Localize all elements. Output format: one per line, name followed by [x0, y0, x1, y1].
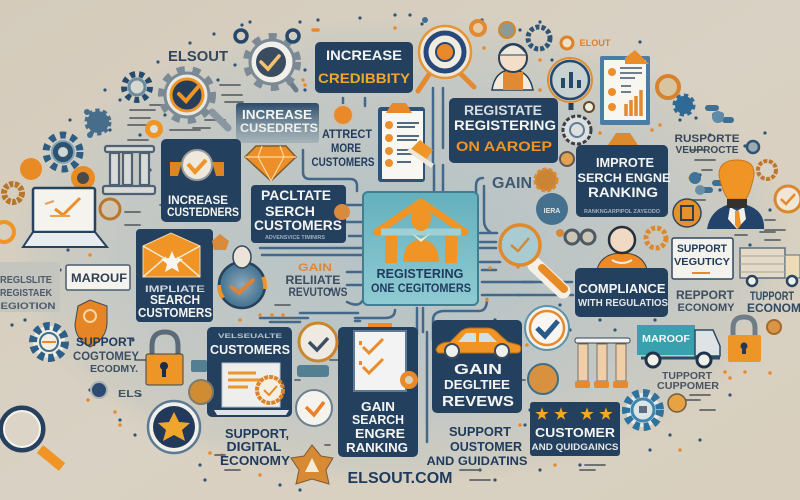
icon: gear left [33, 326, 65, 358]
text: registate registration: REGISTAEK [0, 288, 53, 299]
panel: compliance with regulations: WITH REGULATIOS [578, 298, 668, 309]
text: attract more customers: CUSTOMERS [312, 155, 374, 169]
icon: shield [75, 300, 107, 347]
icon: right badges [673, 161, 800, 227]
panel: customer stars: CUSTOMER [535, 426, 615, 440]
panel: facilitate search customers: CUSTOMERS [254, 217, 342, 233]
text: report economy: REPPORT [676, 290, 734, 302]
panel: customers laptop: CUSTOMERS [210, 343, 290, 357]
text: support digital economy: DIGITAL [226, 440, 282, 454]
icon: star circle [148, 401, 200, 453]
panel: customers laptop: VELSEUALTE [218, 333, 283, 340]
panel: car reviews: DEGLTIEE [444, 377, 510, 392]
panel: increase credibility: INCREASE [326, 47, 402, 63]
panel: gain search engine ranking: RANKING [346, 440, 408, 455]
panel: increase custedners: INCREASE [168, 193, 228, 207]
text: support customer and guidations: OUSTOMER [450, 439, 523, 454]
text: support customer economy: SUPPORT [76, 335, 135, 349]
panel: improve search engine ranking: IMPROTE [596, 156, 654, 170]
panel: facilitate search customers: SERCH [265, 203, 315, 219]
icon: connector tool [191, 360, 329, 377]
panel: improve search engine ranking: RANKING [588, 185, 658, 200]
icon: blue gear [626, 393, 660, 427]
panel: gain search engine ranking: ENGRE [355, 426, 405, 441]
panel: registate registering on maroof: ON AAROEP [456, 139, 552, 154]
orange badge [333, 105, 353, 125]
text: ELOUT: ELOUT [580, 38, 611, 48]
panel: increase credibility [315, 42, 413, 93]
icon: orange seal [657, 76, 679, 98]
text: support customer economy [73, 335, 139, 375]
text: registate registration [0, 262, 60, 312]
icon: pillars [103, 146, 155, 194]
icon: orange ring badge [561, 37, 573, 49]
icon: seal dark [747, 141, 759, 153]
panel: car reviews: GAIN [454, 362, 502, 378]
icon: orange pin [668, 394, 686, 412]
icon: gear link [556, 229, 595, 244]
icon: badge ICRA: IERA [544, 208, 560, 215]
text: tupport economy [747, 291, 800, 315]
panel: car reviews: REVEWS [442, 394, 514, 410]
text: support digital economy: ECONOMY [220, 454, 291, 468]
panel: central registering: ONE CEGITOMERS [371, 281, 471, 295]
icon: orange pillars [575, 338, 630, 388]
text: gain: GAIN [492, 175, 532, 192]
text: rusporte: RUSPORTE [674, 133, 740, 145]
panel: improve search engine ranking: RANKNGARPIPOL ZAYEODO [584, 209, 660, 215]
text: support customer and guidations: AND GUIDATINS [426, 454, 528, 468]
panel: increase custedners [161, 139, 241, 222]
text: tupport cuppomer [657, 371, 720, 392]
text: registate registration: REGLSLITE [0, 275, 52, 286]
icon: clipboard [378, 103, 434, 182]
icon: compliance person [596, 227, 648, 274]
text: gain reliable reviews: GAIN [298, 262, 332, 274]
panel: registate registering on maroof [449, 98, 558, 163]
icon: dark seal left [91, 382, 107, 398]
text: support customer economy: ECODMY. [90, 364, 138, 375]
panel: customer stars [530, 402, 620, 456]
text: registate registration: EGIOTION [0, 301, 56, 312]
panel: customers laptop [207, 327, 292, 417]
panel: compliance with regulations: COMPLIANCE [578, 282, 666, 296]
text: attract more customers: ATTRECT [322, 127, 373, 141]
icon: target magnifier [418, 26, 474, 91]
panel: increase credibility: CREDIBBITY [318, 70, 411, 86]
text: gain reliable reviews [286, 262, 348, 299]
icon: worker top [492, 44, 533, 90]
panel: mail: SEARCH [150, 293, 200, 307]
orange badges left [0, 120, 163, 242]
panel: mail [136, 229, 213, 322]
panel: improve search engine ranking [576, 133, 670, 217]
icon: small orange ring [471, 21, 485, 35]
text: website: ELSOUT.COM [348, 470, 452, 487]
icon: orange gear gain [535, 169, 557, 191]
text: tupport cuppomer: CUPPOMER [657, 381, 720, 392]
text: support digital economy: SUPPORT, [225, 427, 289, 441]
box: support vegutiy: SUPPORT [677, 243, 727, 255]
icon: businessman [707, 160, 764, 229]
box: support vegutiy [672, 238, 733, 279]
icon: laptop check [23, 188, 107, 247]
panel: increase cusedrets: INCREASE [242, 107, 312, 122]
icon: check circles [296, 323, 337, 426]
connector lines [260, 88, 573, 442]
icon: orange coin [528, 364, 558, 394]
icon: truck maroof [637, 325, 720, 367]
icon: person check [219, 246, 265, 308]
panel: customer stars: AND QUIDGAINCS [532, 442, 618, 453]
panel: increase cusedrets: CUSEDRETS [240, 121, 318, 135]
text: tupport cuppomer: TUPPORT [662, 371, 712, 382]
text: rusporte [674, 133, 740, 156]
text: gain reliable reviews: RELIIATE [286, 275, 341, 287]
panel: increase cusedrets [236, 103, 319, 143]
panel: mail: CUSTOMERS [138, 306, 212, 320]
text: support customer and guidations: SUPPORT [449, 424, 511, 439]
text: support customer economy: COGTOMEY [73, 349, 139, 363]
text: report economy: ECONOMY [678, 302, 735, 314]
panel: central registering: REGISTERING [376, 266, 464, 281]
text: attract more customers: MORE [331, 141, 361, 155]
icon: gold star seal [291, 445, 333, 484]
panel: customer stars: ★ [535, 406, 549, 423]
panel: mail: IMPLIATE [145, 284, 205, 295]
box: marouf: MAROUF [71, 273, 127, 285]
icon: orange gear right [646, 228, 666, 248]
icon: truck maroof: MAROOF [642, 334, 690, 345]
panel: facilitate search customers: PACLTATE [261, 187, 331, 203]
text: rusporte: VEUPROCTE [676, 145, 739, 156]
panel: facilitate search customers: ADVENSVICE TIMINIRS [265, 235, 326, 241]
box: marouf [66, 265, 130, 290]
panel: registate registering on maroof: REGISTATE [464, 103, 542, 118]
panel: increase custedners: CUSTEDNERS [167, 205, 239, 219]
icon: lock left [146, 332, 183, 385]
text: support digital economy [220, 427, 291, 468]
panel: gain search engine ranking [338, 323, 418, 457]
text: support customer and guidations [426, 424, 528, 468]
icon: diamond [245, 146, 296, 181]
orange pin [334, 204, 350, 220]
text: ELS: ELS [118, 388, 142, 400]
icon: magnifier bottom-left [1, 408, 62, 467]
icon: tablet report [600, 50, 650, 125]
panel: compliance with regulations [575, 268, 668, 317]
box: support vegutiy: VEGUTICY [674, 256, 730, 268]
text: tupport economy: ECONOM [747, 303, 800, 315]
panel: gain search engine ranking: GAIN [361, 399, 395, 414]
icon: analysis magnifier [548, 58, 592, 110]
panel: customer stars: ★ [554, 406, 568, 423]
blue cog blobs [87, 96, 724, 195]
text: gain reliable reviews: REVUTOWS [288, 287, 348, 299]
panel: customer stars: ★ [580, 406, 594, 423]
icon: orange coin left [189, 380, 213, 404]
panel: central registering [363, 192, 478, 305]
icon: truck top right [740, 248, 800, 286]
icon: check circle right [525, 306, 569, 350]
icon: badge ICRA [536, 193, 568, 225]
panel: registate registering on maroof: REGISTERING [454, 118, 556, 133]
text: ELSOUT top left: ELSOUT [168, 49, 228, 65]
icon: gear magnifier top [235, 30, 299, 90]
panel: car reviews [432, 320, 522, 413]
icon: gear magnifier left [161, 69, 228, 128]
gears top left [46, 74, 150, 169]
text: report economy [676, 290, 735, 314]
text: attract more customers [312, 127, 374, 169]
panel: customer stars: ★ [599, 406, 613, 423]
panel: gain search engine ranking: SEARCH [352, 412, 404, 427]
icon: large magnifier check [500, 225, 564, 291]
gears top right [499, 22, 594, 166]
icon: lock right [728, 317, 761, 362]
panel: facilitate search customers [251, 185, 346, 243]
icon: mail badge [212, 234, 229, 250]
icon: orange badge right [767, 320, 781, 334]
panel: improve search engine ranking: SERCH ENGNE [578, 171, 670, 185]
